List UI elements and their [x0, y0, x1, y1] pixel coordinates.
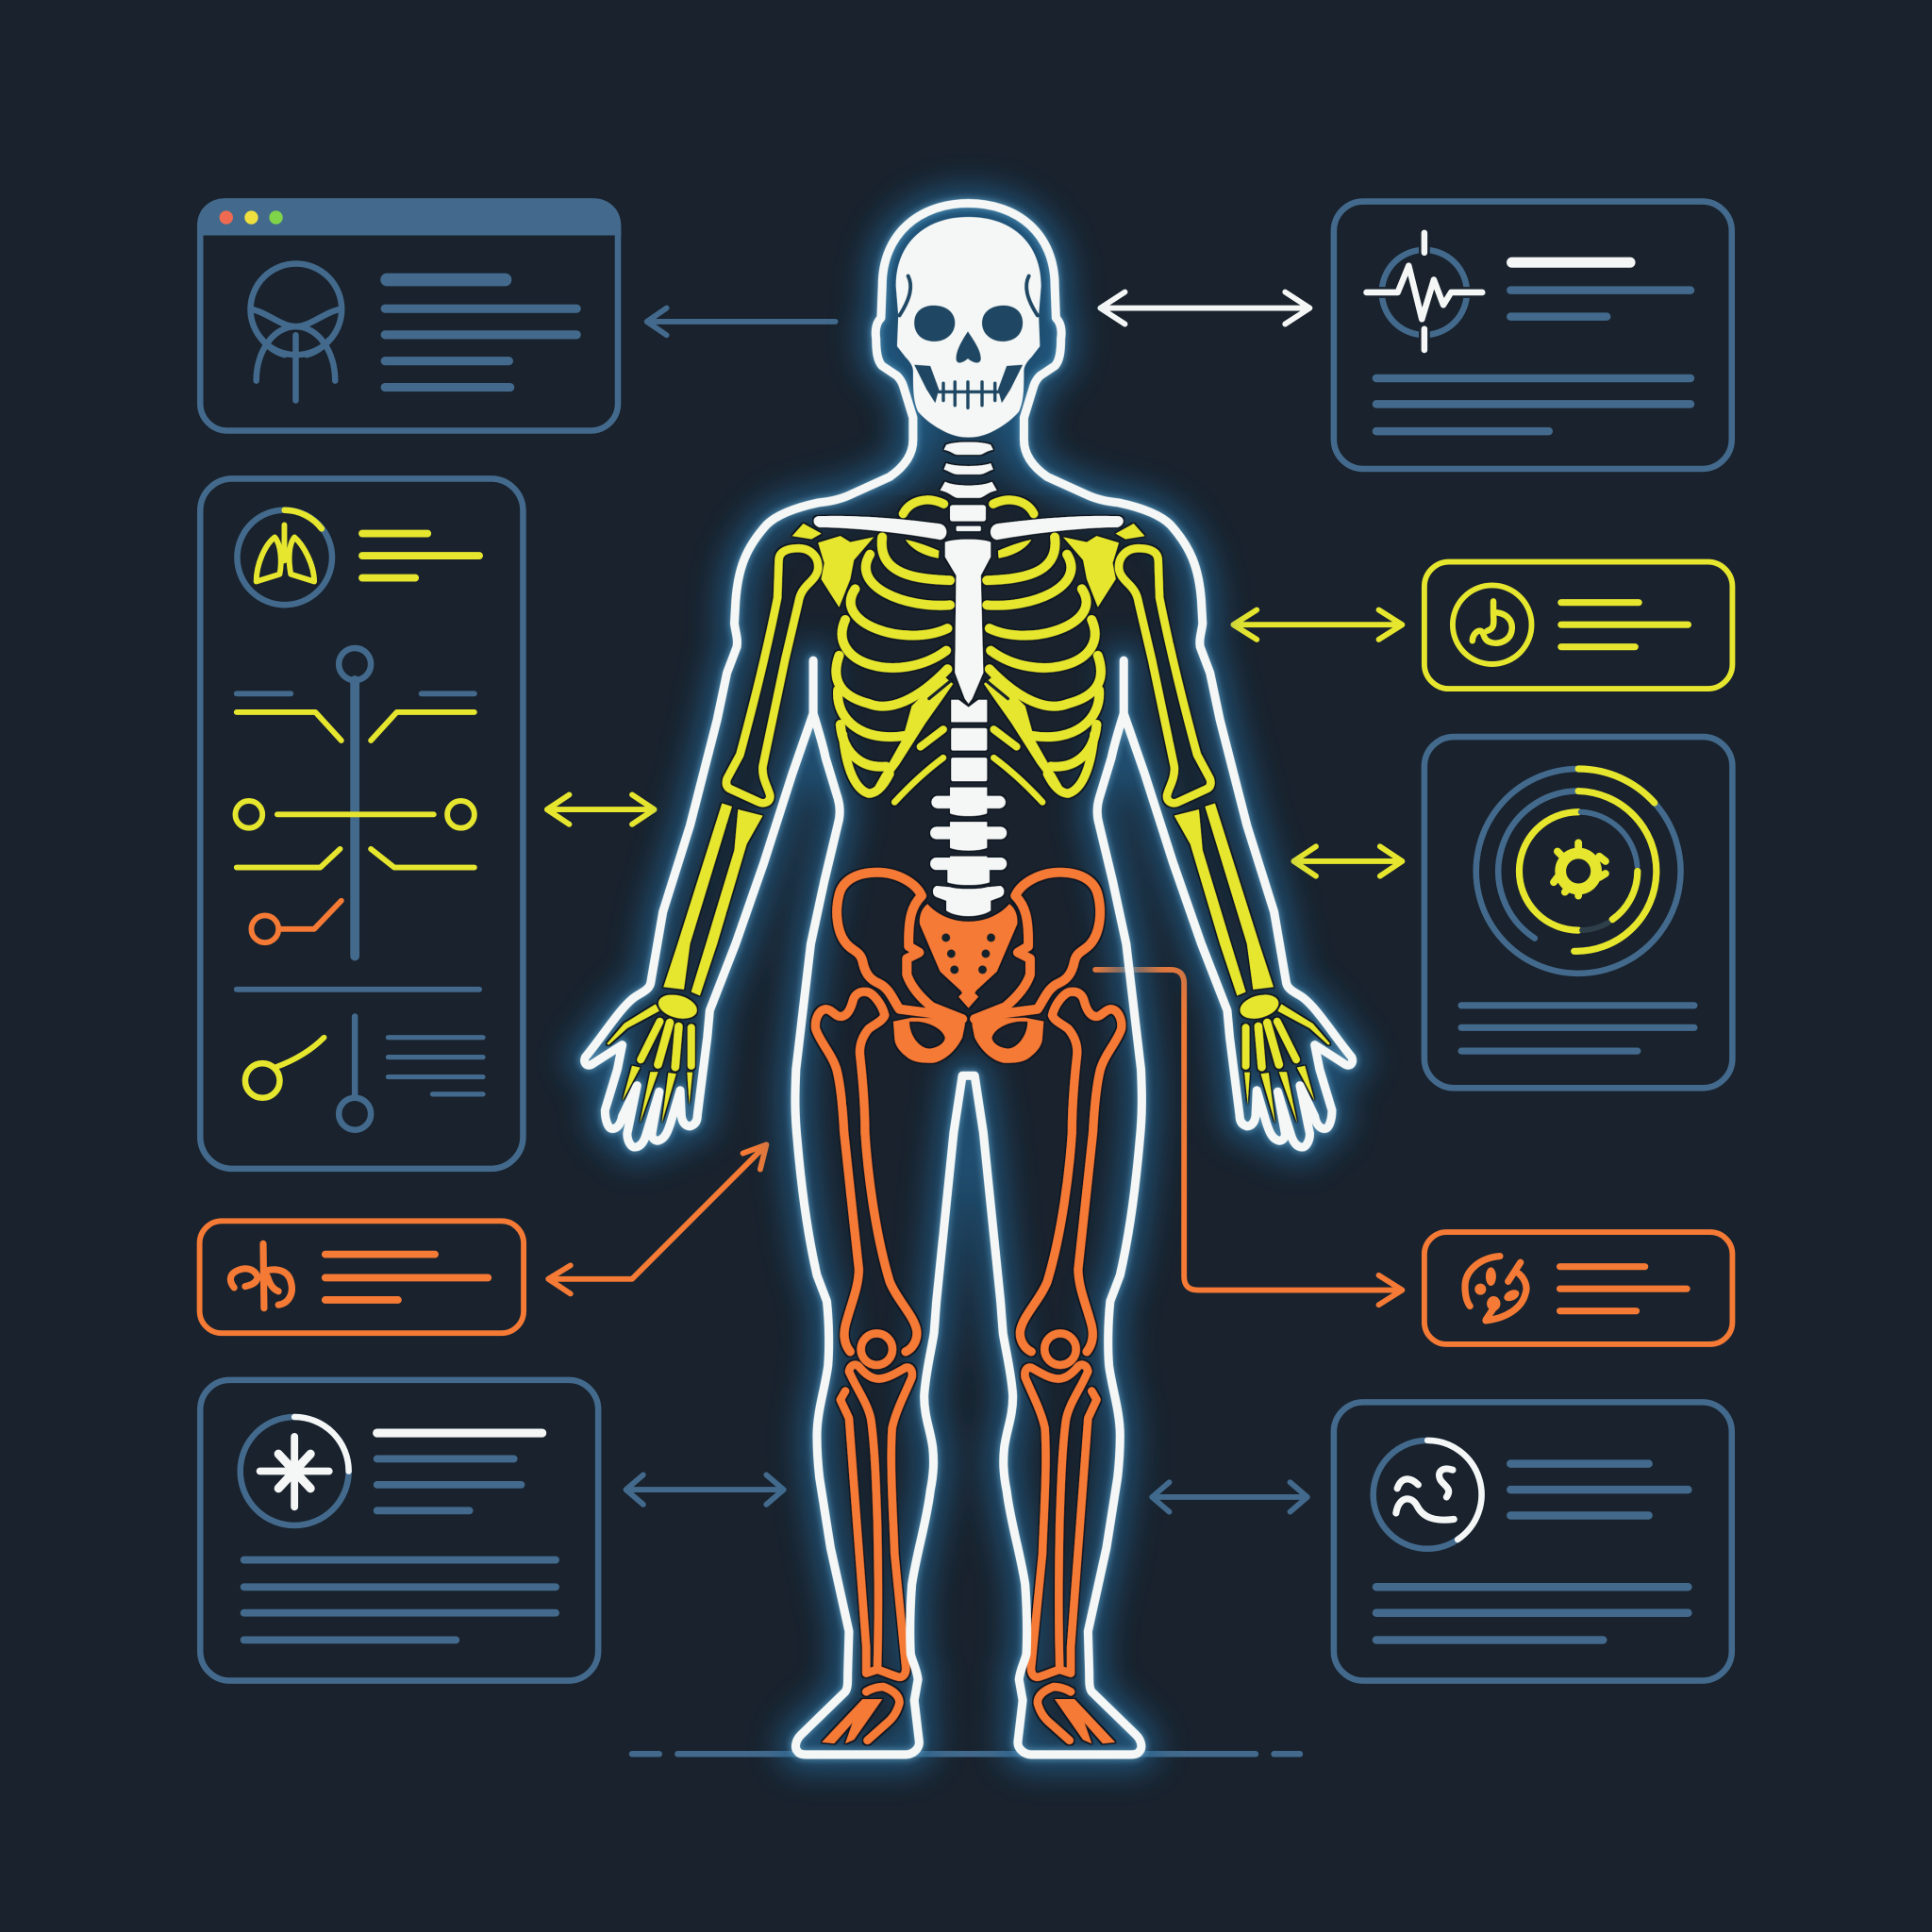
icon: microbes	[1465, 1257, 1526, 1321]
icon: stomach	[1453, 585, 1532, 664]
arrow: circuit panel to arm	[547, 794, 655, 824]
radial gauge	[1476, 769, 1681, 974]
panel: left tall circuit panel	[200, 478, 523, 1169]
arrow: torso to stomach panel	[1233, 610, 1402, 640]
icon: ECG target	[1364, 230, 1485, 351]
arrow: head to browser panel	[647, 308, 836, 335]
nose cavity	[957, 331, 981, 363]
yellow and orange bones, left side	[607, 500, 965, 1743]
arrow: lower left panel to leg	[626, 1474, 784, 1505]
text lines	[1376, 1464, 1688, 1640]
arrow: arm to gear panel	[1293, 846, 1402, 876]
eye sockets	[914, 306, 1023, 341]
window title bar	[197, 198, 621, 235]
body outline, right half	[969, 204, 1353, 1755]
arrow: kidney panel to thigh	[548, 1144, 766, 1293]
teeth	[939, 382, 999, 408]
circuit tree	[235, 648, 483, 1130]
panel: top left browser window	[197, 198, 621, 430]
text lines	[1461, 1006, 1694, 1051]
icon: gear	[1554, 842, 1606, 896]
panel: left orange kidney panel	[200, 1221, 524, 1333]
ground line	[632, 1752, 1300, 1757]
arrow: leg to lower right panel	[1152, 1482, 1307, 1512]
panel: right gear gauge	[1424, 737, 1732, 1088]
panel: lower right	[1334, 1402, 1732, 1681]
jaw gaps	[914, 365, 1023, 403]
icon: kidneys	[230, 1243, 291, 1308]
panel: right orange microbes	[1424, 1232, 1732, 1344]
spine and sternum	[814, 442, 1124, 916]
panel: right yellow stomach	[1424, 562, 1732, 689]
text lines	[1376, 262, 1690, 431]
icon: asterisk dial	[241, 1417, 349, 1525]
body glow	[585, 204, 1353, 1755]
arrow: pelvis to microbes panel	[1095, 970, 1402, 1305]
panel: lower left	[200, 1380, 598, 1681]
panel: top right heartbeat	[1334, 202, 1732, 469]
sacrum holes	[941, 934, 995, 974]
icon: lungs	[237, 510, 332, 605]
text lines	[1561, 603, 1688, 647]
icon: airway dome	[251, 264, 341, 400]
window dots	[220, 210, 283, 225]
arrow: head to heartbeat panel	[1100, 292, 1309, 325]
text lines	[1560, 1267, 1687, 1311]
text lines	[325, 1255, 488, 1300]
icon: swirl dial	[1374, 1441, 1482, 1549]
text lines	[385, 279, 576, 388]
body outline, left half	[585, 204, 969, 1755]
sacrum	[920, 904, 1017, 1008]
skeleton	[607, 442, 1330, 1743]
text lines	[362, 534, 479, 578]
text lines	[244, 1433, 556, 1640]
yellow and orange bones, right side	[973, 500, 1330, 1743]
skull bone	[896, 217, 1041, 438]
temple lines	[899, 276, 1038, 315]
skull	[896, 217, 1041, 438]
